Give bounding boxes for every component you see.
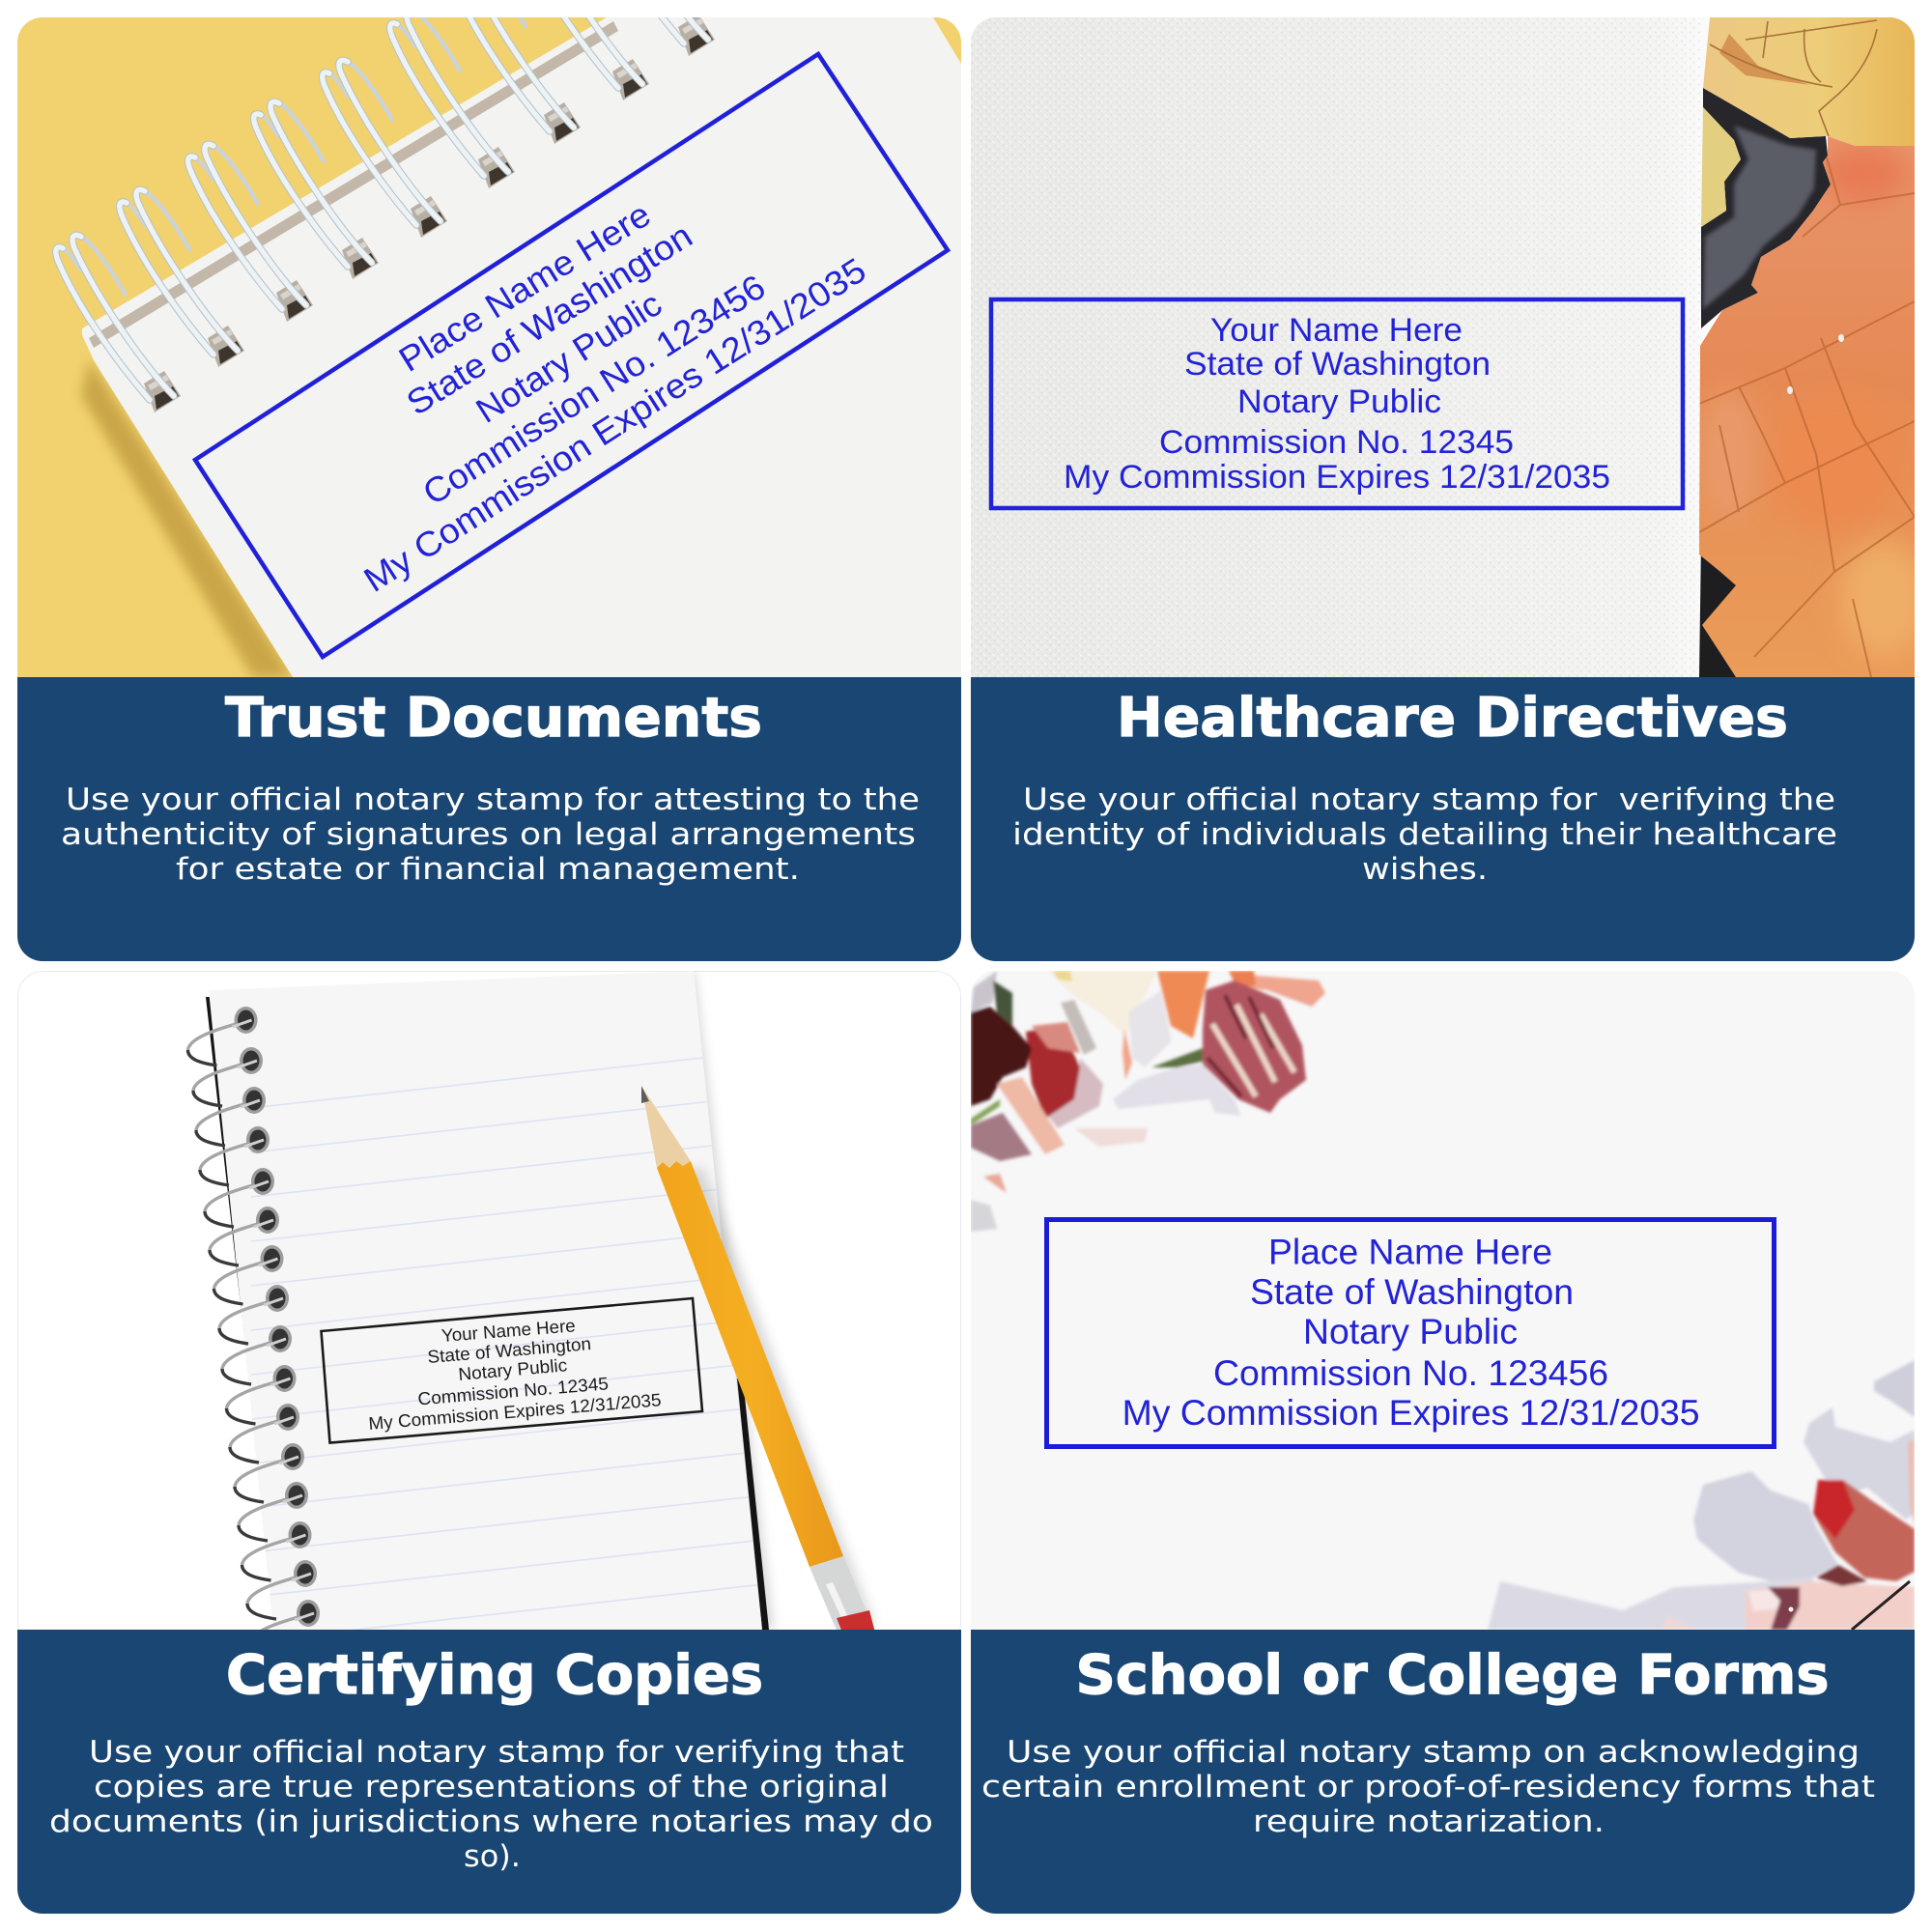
heading: trust documents: Trust Documents [225,687,762,750]
caption block: trust documents [17,677,961,961]
photo: spiral notebook on yellow background [17,0,961,677]
stamp impression: black notary stamp: State of Washington [427,1333,592,1367]
photo: flowers on pale background [971,971,1915,1630]
heading: certifying copies: Certifying Copies [226,1644,763,1707]
text block: certifying copies description: so). [464,1839,521,1874]
text block: school or college forms description [981,1735,1875,1839]
heading: healthcare directives: Healthcare Directives [1117,687,1788,750]
stamp impression: rotated blue notary stamp: My Commission Expires 12/31/2035 [356,250,873,600]
text block: trust documents description: authenticity of signatures on legal arrangements [61,817,916,852]
illustration: flowers in top-left corner [971,971,1325,1232]
stamp impression: black notary stamp: Your Name Here [440,1315,576,1346]
icon: spiral binding rings [187,1007,320,1659]
text block: school or college forms description: certain enrollment or proof-of-residency forms that [981,1770,1875,1804]
stamp impression: blue notary stamp: Notary Public [1237,384,1441,420]
panel: certifying copies [17,971,961,1914]
stamp impression: rotated blue notary stamp [195,54,948,657]
caption block: healthcare directives [971,677,1915,961]
panel: school or college forms [971,971,1915,1914]
stamp impression: blue notary stamp: Notary Public [1303,1312,1518,1351]
text block: trust documents description: Use your official notary stamp for attesting to the [66,782,920,817]
panel: healthcare directives [971,17,1927,961]
caption block: school or college forms [971,1630,1915,1914]
stamp impression: blue notary stamp [991,299,1683,508]
text block: school or college forms description: require notarization. [1253,1804,1605,1839]
text block: healthcare directives description: Use your official notary stamp for verifying the [1023,782,1835,817]
text block: healthcare directives description: wishes. [1362,852,1488,887]
stamp impression: blue notary stamp: Commission No. 12345 [1159,424,1514,461]
panel: trust documents [17,0,961,961]
text block: healthcare directives description [1012,782,1837,887]
stamp impression: black notary stamp [321,1298,702,1443]
text block: trust documents description: for estate or financial management. [176,852,800,887]
stamp impression: black notary stamp: Commission No. 12345 [417,1373,610,1408]
text block: certifying copies description: copies are true representations of the original [94,1770,889,1804]
stamp impression: blue notary stamp [1047,1219,1774,1447]
caption block: certifying copies [17,1630,961,1914]
stamp impression: blue notary stamp: Commission No. 123456 [1213,1353,1608,1393]
icon: yellow pencil [641,1086,875,1633]
photo: textured paper beside autumn leaves [971,17,1927,677]
heading: school or college forms: School or College Forms [1076,1644,1830,1707]
text block: school or college forms description: Use your official notary stamp on acknowledging [1007,1735,1860,1770]
stamp impression: blue notary stamp: Your Name Here [1210,312,1463,349]
text block: healthcare directives description: identity of individuals detailing their healthcare [1012,817,1837,852]
text block: certifying copies description: documents (in jurisdictions where notaries may do [49,1804,933,1839]
photo: spiral notepad with pencil [17,971,961,1659]
illustration: petals and shadows in bottom-right corner [1488,1360,1915,1630]
text block: trust documents description [61,782,920,887]
text block: certifying copies description [49,1735,933,1874]
stamp impression: black notary stamp: Notary Public [458,1354,568,1384]
stamp impression: blue notary stamp: Place Name Here [1268,1233,1552,1271]
stamp impression: blue notary stamp: My Commission Expires 12/31/2035 [1064,459,1610,496]
stamp impression: blue notary stamp: State of Washington [1184,346,1491,383]
stamp impression: black notary stamp: My Commission Expires 12/31/2035 [368,1389,662,1434]
stamp impression: rotated blue notary stamp: Commission No. 123456 [415,267,772,513]
stamp impression: rotated blue notary stamp: Notary Public [469,283,668,431]
stamp impression: rotated blue notary stamp: State of Washington [400,215,699,423]
stamp impression: rotated blue notary stamp: Place Name Here [392,194,657,380]
text block: certifying copies description: Use your official notary stamp for verifying that [89,1735,904,1770]
stamp impression: blue notary stamp: State of Washington [1250,1272,1574,1312]
stamp impression: blue notary stamp: My Commission Expires 12/31/2035 [1122,1393,1700,1433]
